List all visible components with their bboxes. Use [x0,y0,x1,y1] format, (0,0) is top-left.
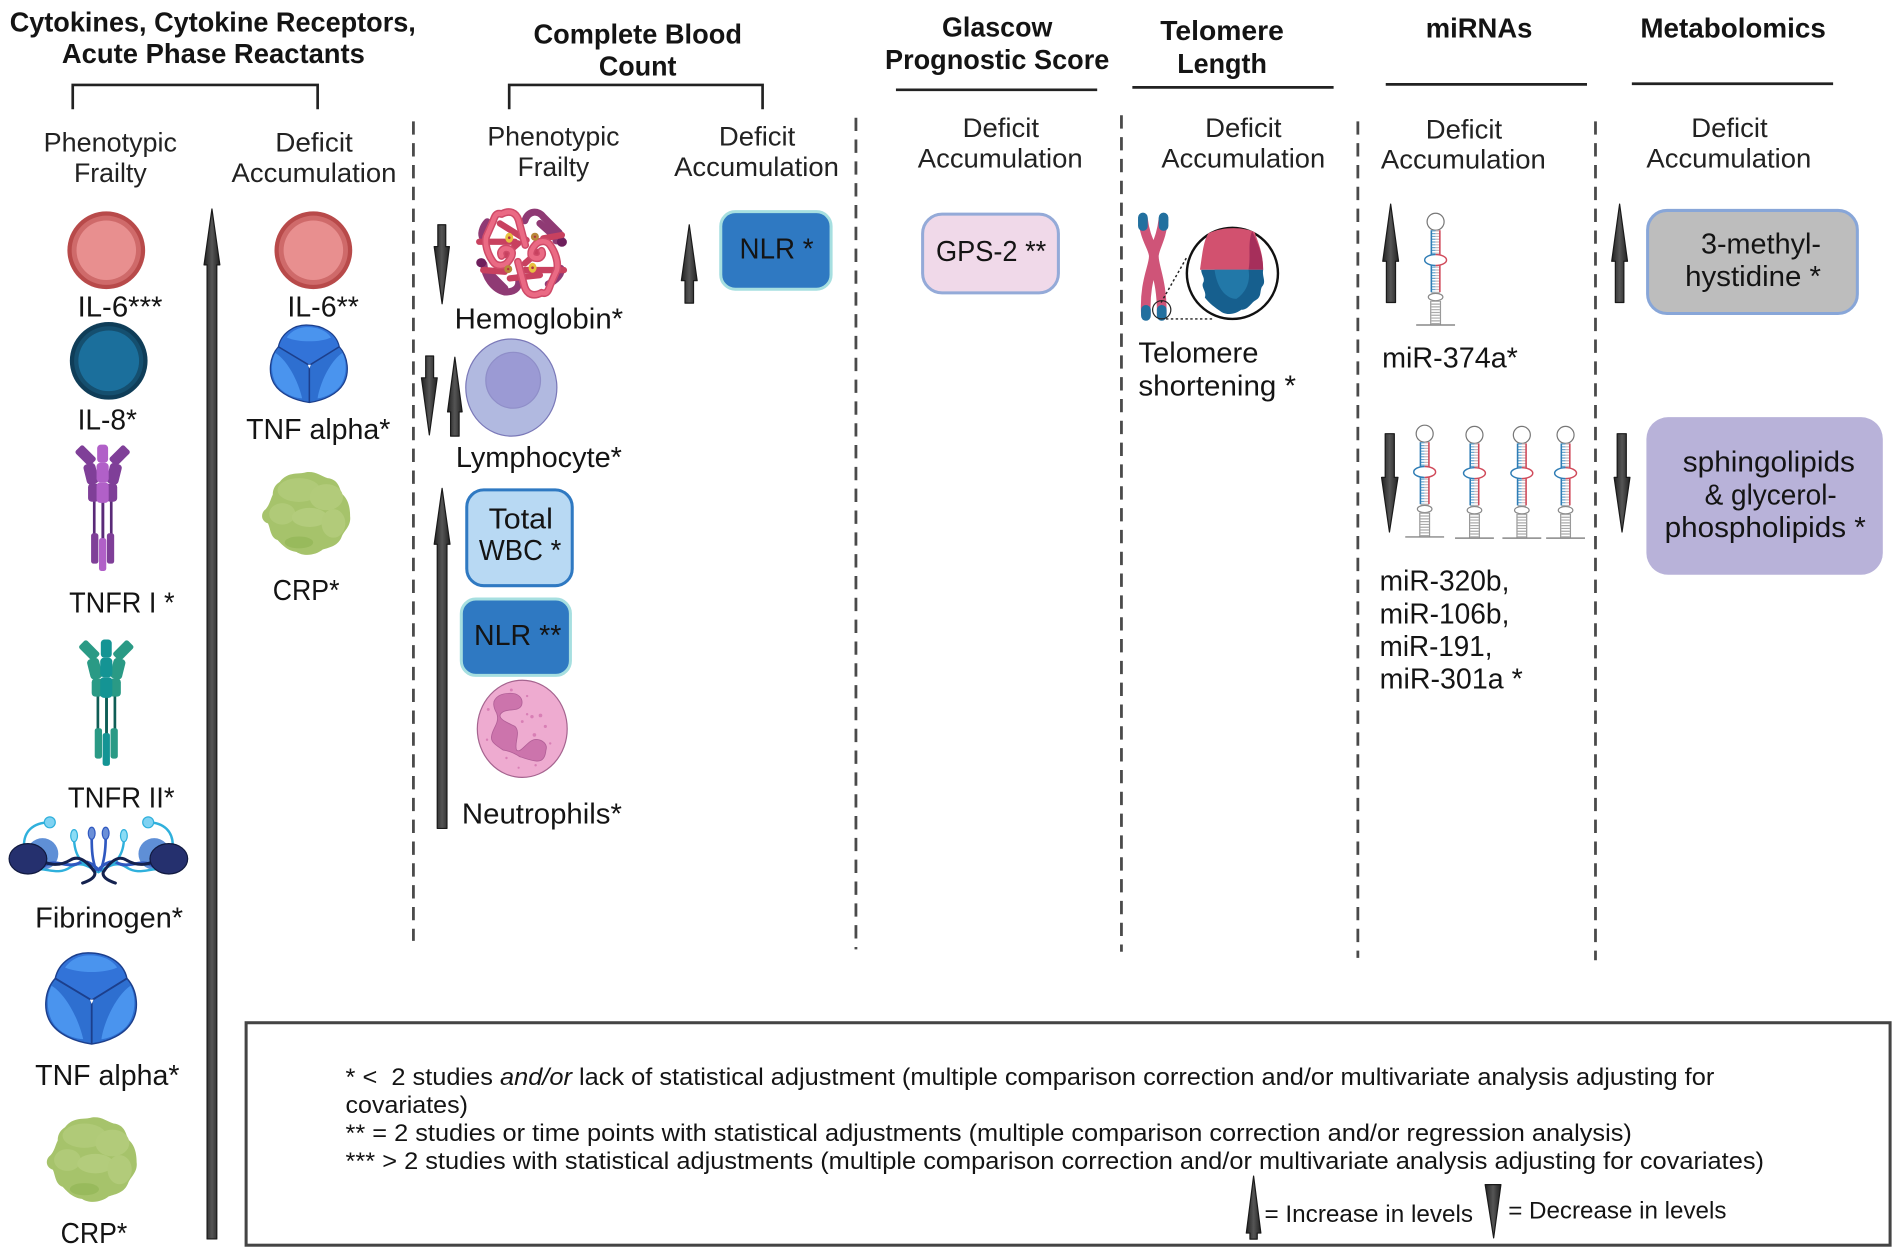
column heading: Glascow Prognostic Score: Glascow [942,11,1053,42]
column heading: Telomere Length: Telomere [1160,15,1284,46]
label: TNF alpha* phenotypic: TNF alpha* [35,1060,179,1092]
label: IL-6**: IL-6** [287,292,359,324]
label: Lymphocyte*: Lymphocyte* [456,442,622,474]
subheading: Deficit Accumulation (cytokines): Deficit [275,128,353,158]
subheading: Phenotypic Frailty (blood count): Phenotypic [487,122,620,152]
label: Neutrophils*: Neutrophils* [462,798,622,830]
label: miR-320b, miR-106b, miR-191, miR-301a *: miR-301a * [1380,664,1523,696]
legend arrow: increase [1246,1176,1261,1239]
box: Total WBC: WBC * [479,535,561,567]
label: Fibrinogen*: Fibrinogen* [35,903,183,935]
label: Hemoglobin*: Hemoglobin* [455,304,623,336]
subheading: Phenotypic Frailty (blood count) [487,122,620,182]
icon: neutrophil [477,680,567,777]
icon: TNF alpha phenotypic [46,953,136,1044]
legend text: significance stars: *** > 2 studies with statistical adjustments (multiple comparison correction and/or multivariate analysis adjusting for covariates) [346,1148,1764,1175]
arrow: long increase, blood count [434,488,450,828]
box: NLR **: NLR ** [474,620,561,652]
legend text: significance stars: ** = 2 studies or time points with statistical adjustments (multiple comparison correction and/or regression analysis) [346,1120,1632,1147]
label: IL-8*: IL-8* [78,404,137,436]
label: miR-374a*: miR-374a* [1382,342,1518,374]
label: TNF alpha* deficit: TNF alpha* [246,414,390,446]
box: NLR *: NLR * [740,233,814,265]
legend label: decrease in levels: = Decrease in levels [1508,1198,1726,1225]
subheading: Deficit Accumulation (blood count): Accumulation [674,152,839,182]
arrow: metabolomics decrease [1614,434,1630,532]
label: CRP* phenotypic: CRP* [61,1218,127,1250]
column heading: Cytokines, Cytokine Receptors, Acute Phase Reactants: Cytokines, Cytokine Receptors, [10,7,416,38]
legend box [246,1023,1890,1245]
subheading: Deficit Accumulation (miRNAs) [1381,114,1546,175]
legend text: significance stars: covariates) [346,1092,468,1119]
column heading: Telomere Length: Length [1177,48,1267,79]
icon: TNFR II receptor [78,639,134,766]
arrow: long increase, cytokines [204,209,220,1239]
column heading: Complete Blood Count: Count [599,50,677,81]
box: sphingolipids & glycerol-phospholipids * [1646,417,1883,575]
column heading: Complete Blood Count [533,19,742,81]
box: GPS-2 ** [923,214,1058,293]
column heading: Cytokines, Cytokine Receptors, Acute Phase Reactants [10,7,416,69]
arrow: metabolomics increase [1612,204,1628,303]
arrow: NLR deficit increase [681,225,697,303]
icon: IL-8 [70,322,148,400]
subheading: Deficit Accumulation (Glascow): Deficit [963,113,1040,143]
subheading: Phenotypic Frailty (cytokines) [44,128,177,188]
box: 3-methyl-hystidine *: 3-methyl- [1701,228,1821,260]
arrow: lymphocyte decrease [421,356,437,435]
label: Telomere shortening *: shortening * [1138,370,1296,402]
icon: IL-6 phenotypic [67,211,145,289]
subheading: Deficit Accumulation (Glascow): Accumulation [918,143,1083,173]
bracket: complete blood count [509,85,763,109]
column heading: Telomere Length [1160,15,1284,79]
subheading: Deficit Accumulation (cytokines) [232,128,396,188]
column heading: Cytokines, Cytokine Receptors, Acute Phase Reactants: Acute Phase Reactants [62,38,365,69]
icon: CRP deficit [262,472,350,555]
box: 3-methyl-hystidine *: hystidine * [1685,261,1821,293]
subheading: Deficit Accumulation (metabolomics): Deficit [1691,113,1768,143]
label: CRP* deficit: CRP* [273,575,339,607]
subheading: Deficit Accumulation (telomere): Accumulation [1161,143,1325,173]
subheading: Deficit Accumulation (cytokines): Accumulation [232,158,396,188]
subheading: Phenotypic Frailty (cytokines): Phenotypic [44,128,177,158]
box: NLR ** [461,599,570,675]
label: TNFR II*: TNFR II* [68,783,175,815]
label: Telomere shortening * [1138,338,1296,402]
column heading: Metabolomics: Metabolomics [1640,13,1826,44]
arrow: hemoglobin decrease [434,225,449,304]
subheading: Deficit Accumulation (Glascow) [918,113,1083,173]
subheading: Phenotypic Frailty (cytokines): Frailty [74,158,147,188]
label: miR-320b, miR-106b, miR-191, miR-301a *: miR-191, [1380,631,1492,663]
label: miR-320b, miR-106b, miR-191, miR-301a *: miR-320b, [1380,566,1509,598]
subheading: Phenotypic Frailty (blood count): Frailty [518,152,590,182]
arrow: lymphocyte increase [448,357,462,436]
icon: chromosome with telomere magnified [1143,218,1278,319]
subheading: Deficit Accumulation (metabolomics): Accumulation [1646,143,1811,173]
icon: IL-6 deficit [274,211,352,289]
box: NLR * [721,212,831,289]
label: IL-6***: IL-6*** [78,292,162,324]
box: 3-methyl-hystidine * [1648,210,1857,313]
column heading: Complete Blood Count: Complete Blood [533,19,742,50]
icon: four miRNA hairpins [1405,425,1585,538]
box: sphingolipids & glycerol-phospholipids *: phospholipids * [1665,512,1866,544]
box: GPS-2 **: GPS-2 ** [936,236,1046,268]
icon: TNFR I receptor [74,444,131,571]
legend text: significance stars [346,1064,1764,1175]
column heading: miRNAs: miRNAs [1426,13,1532,44]
column heading: Glascow Prognostic Score [885,11,1109,75]
icon: fibrinogen [9,817,188,883]
legend arrow: decrease [1485,1185,1501,1238]
icon: hemoglobin [476,212,567,295]
subheading: Deficit Accumulation (metabolomics) [1646,113,1811,173]
legend text: significance stars: * < 2 studies and/or lack of statistical adjustment (multiple comparison correction and/or multivariate analysis adjusting for [346,1064,1714,1091]
subheading: Deficit Accumulation (miRNAs): Deficit [1426,114,1503,144]
box: sphingolipids & glycerol-phospholipids *: & glycerol- [1705,479,1837,511]
box: Total WBC: Total [489,504,553,536]
icon: TNF alpha deficit [270,325,347,402]
arrow: miRNA increase [1383,204,1399,303]
arrow: miRNA decrease [1382,434,1398,532]
icon: lymphocyte [466,339,557,436]
icon: CRP phenotypic [47,1117,137,1202]
bracket: cytokines [73,85,318,109]
subheading: Deficit Accumulation (telomere): Deficit [1205,113,1282,143]
column heading: Glascow Prognostic Score: Prognostic Score [885,44,1109,75]
label: TNFR I *: TNFR I * [69,587,175,619]
subheading: Deficit Accumulation (blood count): Deficit [719,122,796,152]
label: miR-320b, miR-106b, miR-191, miR-301a * [1380,566,1523,696]
subheading: Deficit Accumulation (blood count) [674,122,839,182]
subheading: Deficit Accumulation (telomere) [1161,113,1325,173]
legend label: increase in levels: = Increase in levels [1265,1201,1473,1228]
subheading: Deficit Accumulation (miRNAs): Accumulation [1381,145,1546,175]
label: Telomere shortening *: Telomere [1138,338,1258,370]
box: sphingolipids & glycerol-phospholipids *: sphingolipids [1683,447,1855,479]
icon: miR-374a hairpin [1416,213,1455,325]
label: miR-320b, miR-106b, miR-191, miR-301a *: miR-106b, [1380,598,1509,630]
box: Total WBC [467,490,572,586]
